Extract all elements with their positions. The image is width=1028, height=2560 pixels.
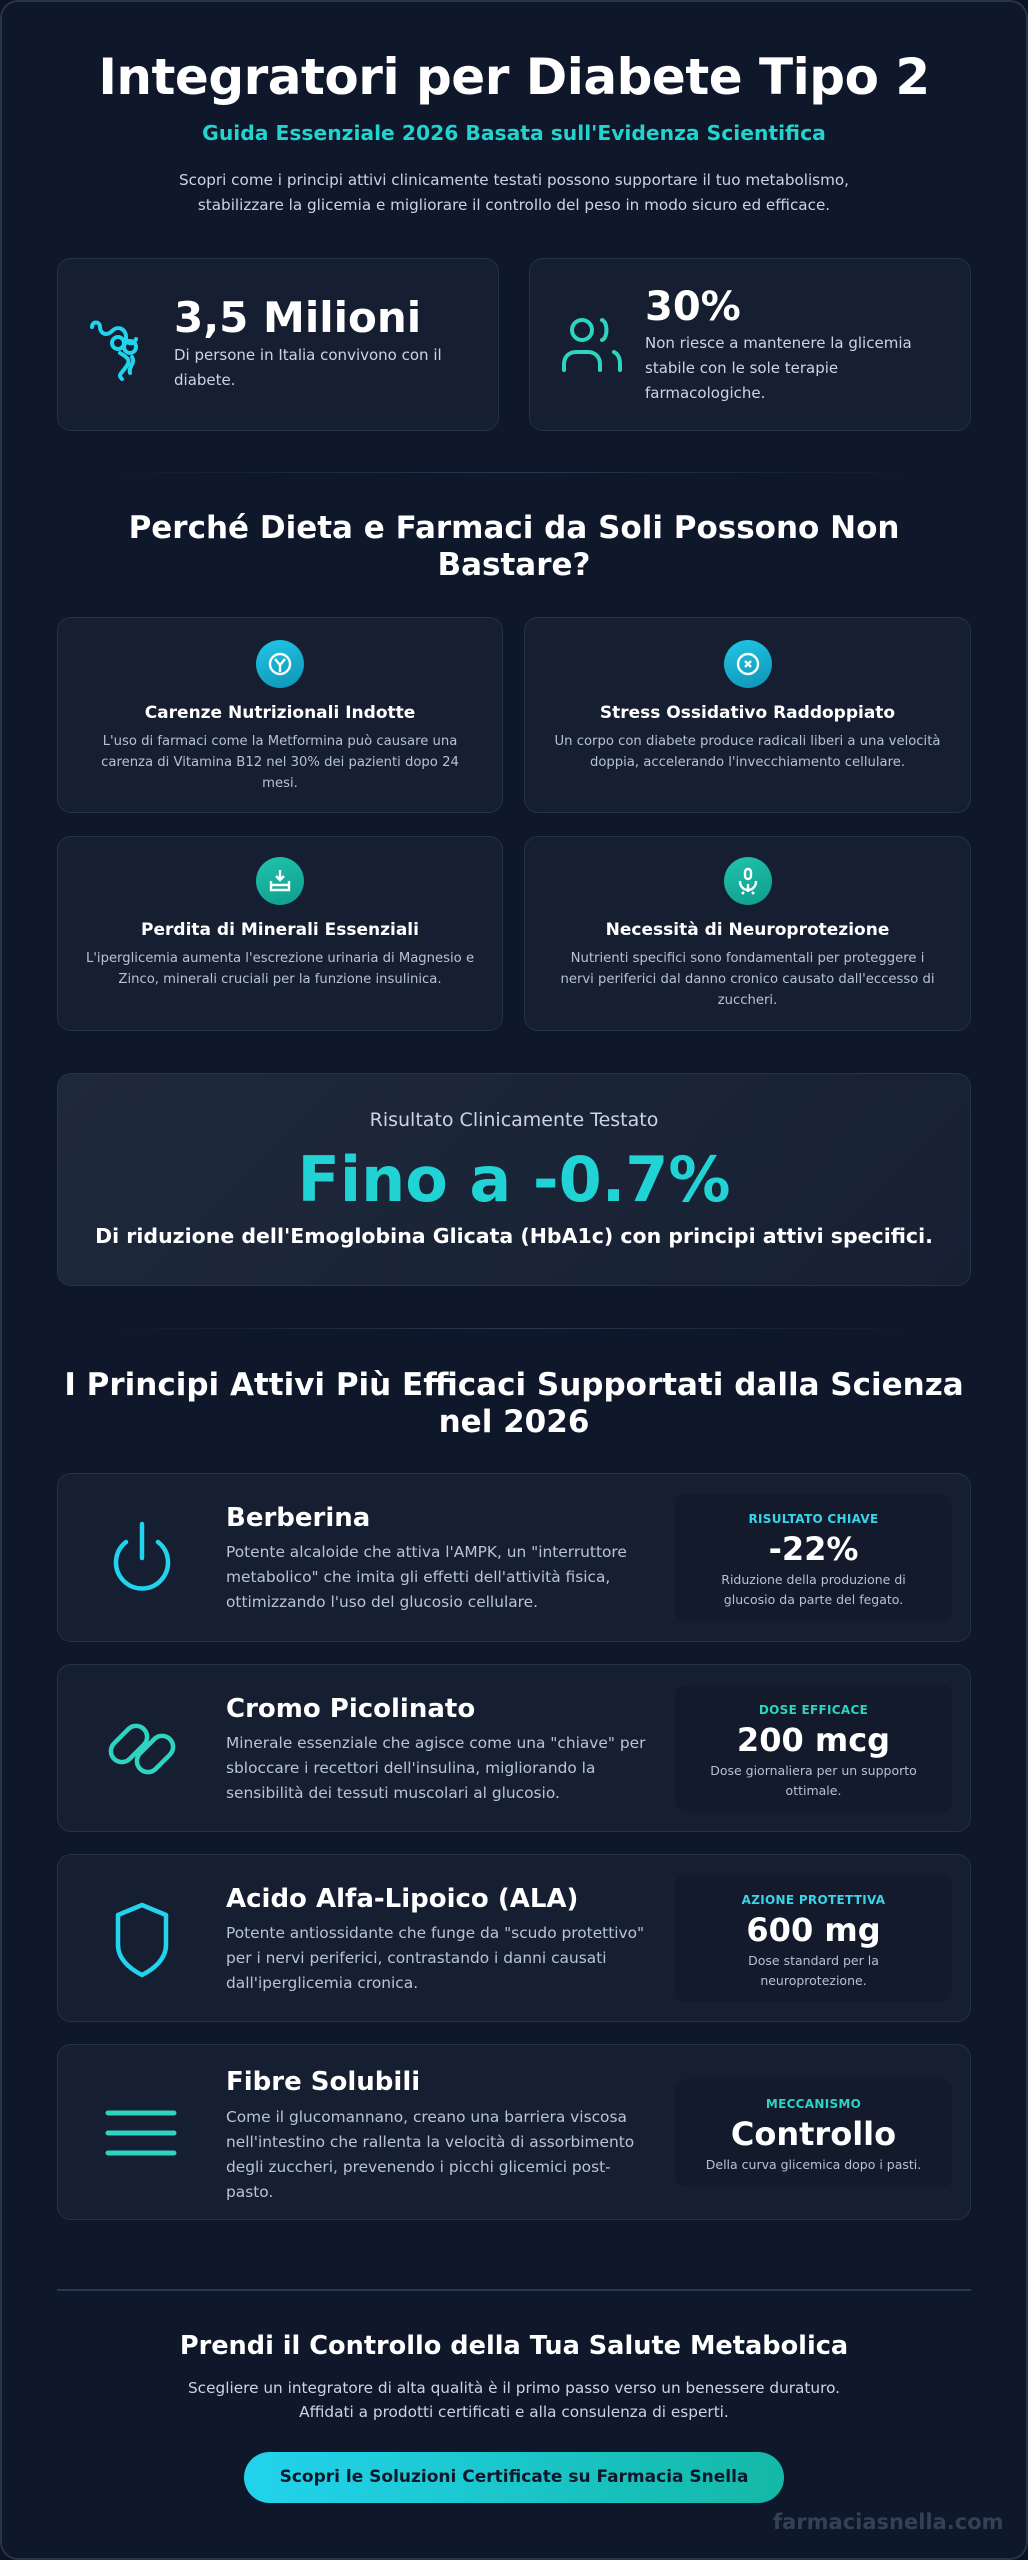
- stat box: MECCANISMO: [766, 2097, 861, 2111]
- ingredient title: Berberina: [226, 1503, 370, 1533]
- icon: users: [562, 318, 622, 372]
- cta button: Scopri le Soluzioni Certificate su Farmacia Snella: [280, 2467, 748, 2487]
- callout: risultato clinico: [57, 1073, 971, 1286]
- stat box: [675, 2079, 952, 2187]
- icon: [256, 640, 304, 688]
- ingredient title: Acido Alfa-Lipoico (ALA): [226, 1884, 578, 1914]
- stat value: 3,5 Milioni: [174, 293, 421, 342]
- panel: acido alfa-lipoico: [57, 1854, 971, 2022]
- stat box: neuroprotezione.: [760, 1973, 867, 1988]
- panel: fibre solubili: [57, 2044, 971, 2220]
- panel: berberina: [57, 1473, 971, 1642]
- icon: [256, 857, 304, 905]
- icon: power: [114, 1522, 170, 1591]
- icon: [724, 640, 772, 688]
- heading: perché: Perché Dieta e Farmaci da Soli Possono Non Bastare?: [129, 510, 899, 583]
- panel: stress ossidativo: [524, 617, 971, 813]
- stat box: DOSE EFFICACE: [759, 1703, 868, 1717]
- stat box: Dose standard per la: [748, 1953, 879, 1968]
- stat description: Non riesce a mantenere la glicemia stabile con le sole terapie farmacologiche.: [645, 334, 912, 402]
- stat box: ottimale.: [786, 1783, 841, 1798]
- cta text: Affidati a prodotti certificati e alla consulenza di esperti.: [299, 2403, 729, 2421]
- stat card: 3,5 milioni: [57, 258, 499, 431]
- panel: cromo: [57, 1664, 971, 1832]
- ingredient desc: Potente antiossidante che funge da "scudo protettivo" per i nervi periferici, contrastando i danni causati dall'iperglicemia cronica.: [226, 1924, 644, 1992]
- intro text: Scopri come i principi attivi clinicamente testati possono supportare il tuo metabolismo, stabilizzare la glicemia e migliorare il controllo del peso in modo sicuro ed efficace.: [179, 171, 849, 214]
- panel desc: Un corpo con diabete produce radicali liberi a una velocità doppia, accelerando l'invecchiamento cellulare.: [555, 734, 940, 770]
- stat box: AZIONE PROTETTIVA: [742, 1893, 885, 1907]
- stat box: 200 mcg: [737, 1721, 890, 1759]
- cta text: [188, 2379, 840, 2421]
- stat box: [675, 1875, 952, 2002]
- stat box: [675, 1685, 952, 1812]
- stat box: glucosio da parte del fegato.: [724, 1592, 903, 1607]
- stat box: -22%: [769, 1530, 858, 1568]
- watermark: farmaciasnella.com: [773, 2510, 1004, 2534]
- icon: [724, 857, 772, 905]
- heading: principi attivi: I Principi Attivi Più Efficaci Supportati dalla Scienza nel 2026: [64, 1367, 964, 1440]
- panel desc: L'iperglicemia aumenta l'escrezione urinaria di Magnesio e Zinco, minerali cruciali per la funzione insulinica.: [86, 951, 474, 987]
- stat box: Controllo: [731, 2115, 896, 2153]
- ingredient desc: Come il glucomannano, creano una barriera viscosa nell'intestino che rallenta la velocità di assorbimento degli zuccheri, prevenendo i picchi glicemici post-pasto.: [226, 2108, 634, 2201]
- cta heading: Prendi il Controllo della Tua Salute Metabolica: [180, 2331, 848, 2361]
- stat box: [675, 1494, 952, 1621]
- stat box: Riduzione della produzione di: [721, 1572, 906, 1587]
- stat box: Dose giornaliera per un supporto: [710, 1763, 917, 1778]
- panel: perdita minerali: [57, 836, 503, 1031]
- stat box: RISULTATO CHIAVE: [748, 1512, 878, 1526]
- panel title: Carenze Nutrizionali Indotte: [145, 703, 415, 723]
- panel title: Perdita di Minerali Essenziali: [141, 920, 419, 940]
- callout value: Fino a -0.7%: [297, 1143, 731, 1216]
- icon: lines: [106, 2110, 176, 2156]
- ingredient desc: Potente alcaloide che attiva l'AMPK, un "interruttore metabolico" che imita gli effetti dell'attività fisica, ottimizzando l'uso del glucosio cellulare.: [226, 1543, 627, 1611]
- icon: dna: [90, 320, 138, 382]
- cta text: Scegliere un integratore di alta qualità è il primo passo verso un benessere duraturo.: [188, 2379, 840, 2397]
- stat description: Di persone in Italia convivono con il diabete.: [174, 346, 442, 389]
- cta button: [244, 2452, 784, 2503]
- ingredient title: Fibre Solubili: [226, 2067, 420, 2097]
- stat value: 30%: [645, 284, 741, 330]
- ingredient desc: Minerale essenziale che agisce come una "chiave" per sbloccare i recettori dell'insulina, migliorando la sensibilità dei tessuti muscolari al glucosio.: [226, 1734, 645, 1802]
- panel: neuroprotezione: [524, 836, 971, 1031]
- icon: shield: [116, 1902, 168, 1978]
- callout label: Risultato Clinicamente Testato: [370, 1109, 658, 1131]
- stat box: Della curva glicemica dopo i pasti.: [706, 2157, 921, 2172]
- callout description: Di riduzione dell'Emoglobina Glicata (HbA1c) con principi attivi specifici.: [95, 1224, 933, 1248]
- panel desc: Nutrienti specifici sono fondamentali per proteggere i nervi periferici dal danno cronico causato dall'eccesso di zuccheri.: [560, 951, 935, 1008]
- stat box: 600 mg: [746, 1911, 881, 1949]
- icon: pill: [108, 1724, 176, 1774]
- subtitle: Guida Essenziale 2026 Basata sull'Evidenza Scientifica: [202, 121, 826, 145]
- title: Integratori per Diabete Tipo 2: [98, 48, 930, 106]
- panel title: Stress Ossidativo Raddoppiato: [600, 703, 895, 723]
- panel: carenze nutrizionali: [57, 617, 503, 813]
- panel title: Necessità di Neuroprotezione: [606, 920, 889, 940]
- panel desc: L'uso di farmaci come la Metformina può causare una carenza di Vitamina B12 nel 30% dei pazienti dopo 24 mesi.: [101, 734, 459, 791]
- stat card: 30%: [529, 258, 971, 431]
- ingredient title: Cromo Picolinato: [226, 1694, 475, 1724]
